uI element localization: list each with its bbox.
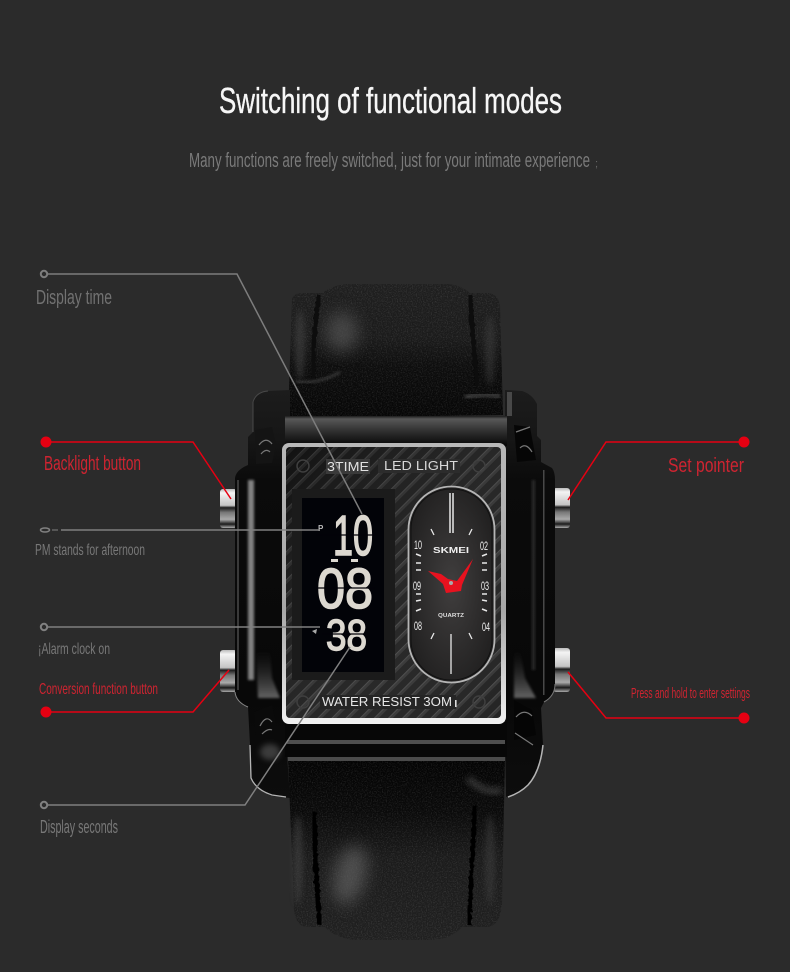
LCD PM marker: P [318, 524, 324, 533]
callout: set pointer [568, 436, 750, 500]
side buttons [220, 488, 570, 692]
dial printed labels: 3TIME [327, 459, 369, 474]
callout: backlight button: Backlight button [44, 453, 141, 475]
dial printed labels [320, 458, 460, 709]
hour numerals [413, 538, 490, 634]
hour numerals: 09 [413, 579, 421, 593]
case rims [250, 745, 286, 797]
subtitle: Many functions are freely switched, just for your intimate experience [189, 150, 590, 172]
watch case [235, 390, 555, 798]
watch illustration [220, 284, 570, 940]
hour markers [416, 493, 487, 674]
hour numerals: 10 [414, 538, 422, 552]
callout: PM: PM stands for afternoon [35, 542, 145, 559]
LCD hour digits: 10 [333, 504, 373, 568]
dial printed labels: LED LIGHT [384, 458, 458, 473]
top leather strap [288, 284, 503, 418]
case highlights [248, 480, 254, 680]
callout: backlight button [40, 436, 231, 499]
callout: display time [36, 271, 362, 514]
bottom leather strap [288, 757, 505, 940]
callout: alarm: ¡Alarm clock on [38, 641, 110, 658]
LCD segment gaps [316, 535, 375, 634]
LCD alarm marker [312, 629, 317, 634]
title: Switching of functional modes [219, 80, 562, 121]
callout: alarm [38, 624, 320, 658]
callout: display seconds: Display seconds [40, 817, 118, 837]
callout: press and hold [568, 672, 750, 724]
hour numerals: 02 [480, 539, 488, 553]
callout: set pointer: Set pointer [668, 455, 744, 477]
WATER RESIST badge [320, 695, 456, 709]
subtitle trailing mark: ; [595, 158, 598, 170]
LCD display [292, 489, 395, 680]
red hands [428, 559, 473, 593]
dial frame and striped dial [282, 443, 506, 724]
LCD minute digits: 08 [317, 557, 373, 621]
QUARTZ label: QUARTZ [438, 613, 465, 619]
hour numerals: 04 [482, 620, 490, 634]
LED LIGHT badge [378, 459, 460, 473]
callout: PM [35, 528, 320, 559]
hour numerals: 08 [414, 619, 422, 633]
hour numerals: 03 [481, 579, 489, 593]
3TIME badge [326, 459, 370, 474]
callout: conversion function button [39, 670, 229, 718]
callout: display time: Display time [36, 287, 112, 309]
analog oval dial [408, 486, 494, 682]
SKMEI brand: SKMEI [433, 545, 469, 555]
callout: conversion function button: Conversion function button [39, 681, 158, 698]
dial printed labels: WATER RESIST 3OM [322, 694, 452, 709]
corner screws [254, 425, 536, 745]
LCD seconds digits: 38 [326, 611, 367, 660]
LCD colon dashes [331, 559, 358, 562]
callout: display seconds [40, 647, 350, 837]
